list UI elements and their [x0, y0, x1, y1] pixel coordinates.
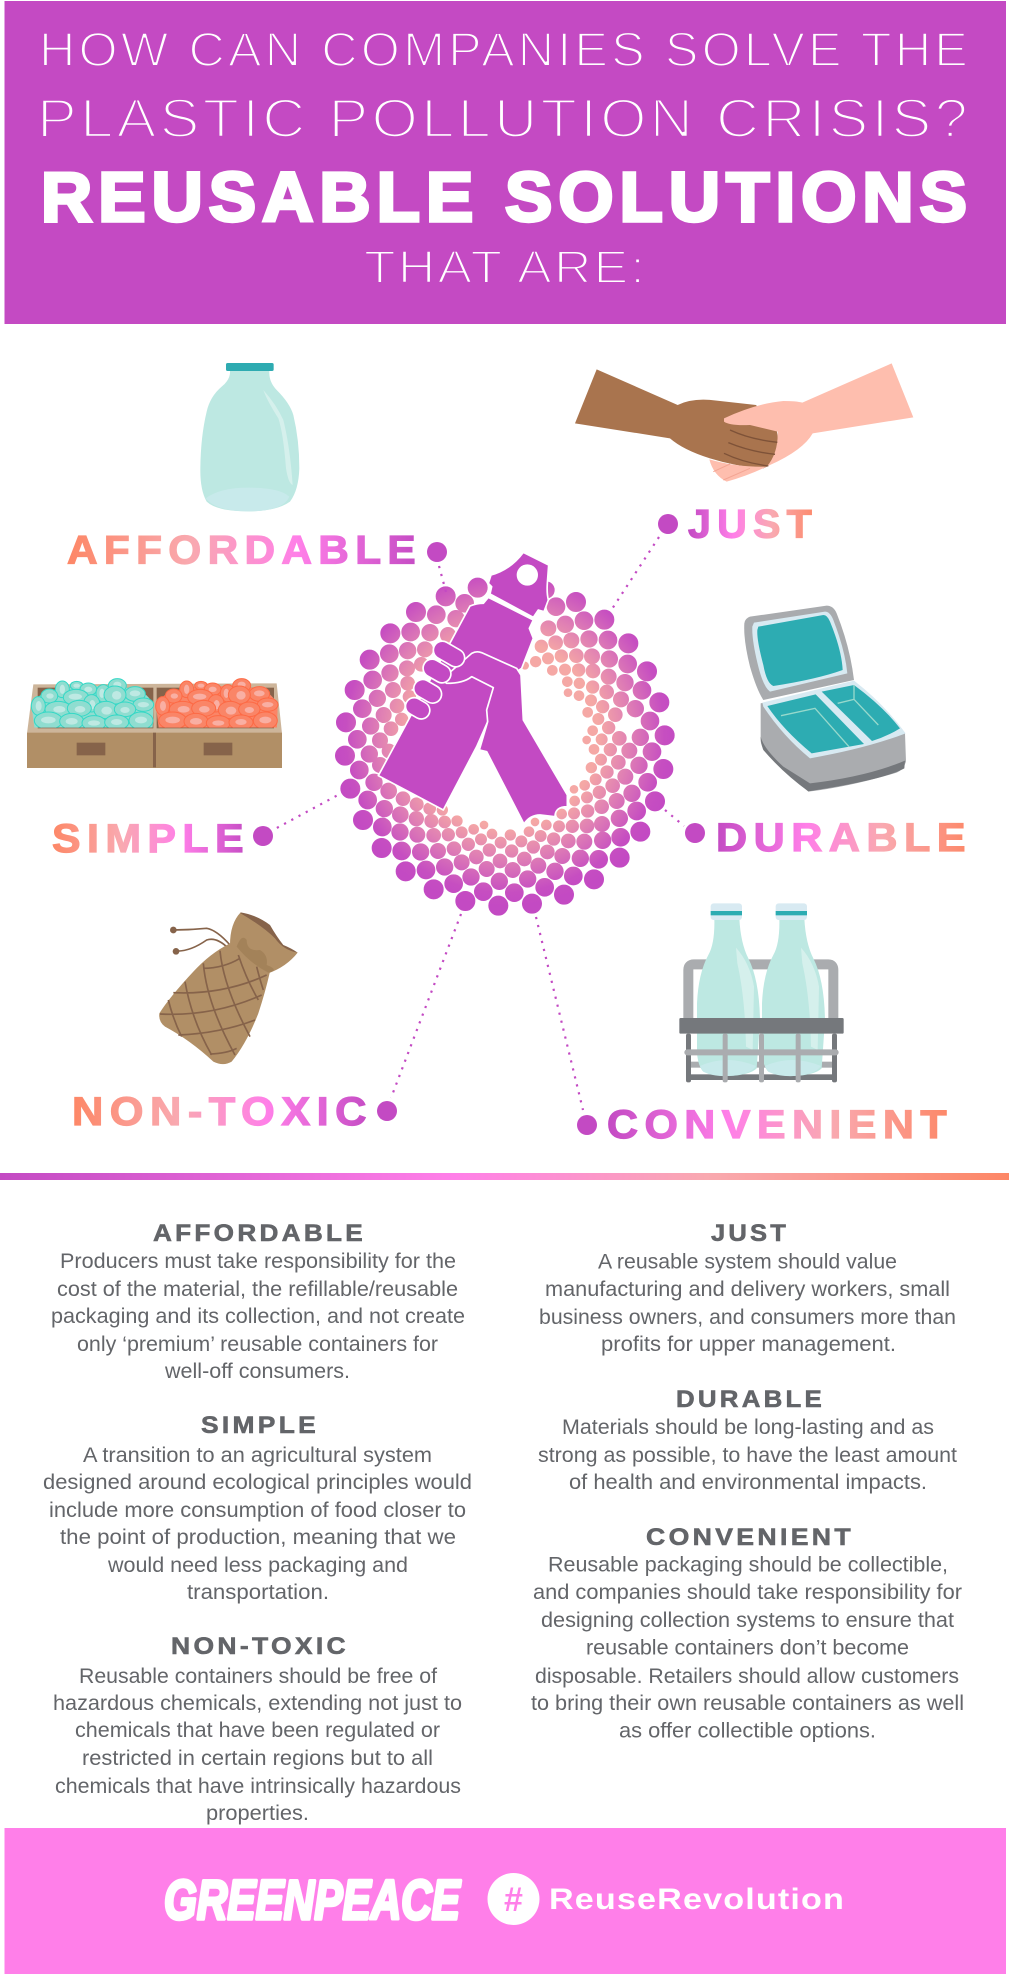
text block: just: manufacturing and delivery workers, small: [545, 1277, 950, 1301]
text block: non-toxic: NON-TOXIC: [171, 1633, 349, 1660]
text block: non-toxic: properties.: [206, 1801, 309, 1825]
icon: glass jar: [200, 363, 299, 511]
text block: convenient: Reusable packaging should be collectible,: [548, 1552, 948, 1576]
hashtag badge: [488, 1873, 540, 1925]
icon: milk bottles in carrier: [679, 903, 844, 1082]
callout: affordable: AFFORDABLE: [67, 528, 422, 572]
title line 1: HOW CAN COMPANIES SOLVE THE: [39, 24, 971, 77]
icon: handshake: [575, 363, 913, 482]
text block: non-toxic: hazardous chemicals, extending not just to: [53, 1691, 462, 1715]
text block: just: business owners, and consumers more than: [539, 1305, 956, 1329]
Greenpeace wordmark: GREENPEACE: [164, 1868, 461, 1931]
header panel: [4, 1, 1006, 324]
text block: affordable: well-off consumers.: [164, 1359, 350, 1383]
title line 3: REUSABLE SOLUTIONS: [41, 158, 973, 236]
title line 2: PLASTIC POLLUTION CRISIS?: [37, 87, 971, 149]
hashtag badge: #: [504, 1881, 523, 1919]
callout: durable: [665, 810, 972, 860]
text block: non-toxic: restricted in certain regions but to all: [82, 1746, 433, 1770]
text block: durable: DURABLE: [676, 1386, 825, 1413]
text block: just: profits for upper management.: [601, 1332, 896, 1356]
text block: affordable: only ‘premium’ reusable containers for: [77, 1332, 438, 1356]
callout: convenient: CONVENIENT: [607, 1103, 953, 1147]
callout: convenient: [536, 917, 953, 1147]
dot ring: [335, 578, 674, 915]
text block: convenient: [531, 1524, 964, 1742]
callout: just: JUST: [688, 502, 818, 546]
callout: affordable: [67, 528, 447, 592]
callout: durable: DURABLE: [716, 816, 972, 860]
text block: convenient: CONVENIENT: [646, 1524, 854, 1551]
icon: produce crates: [27, 679, 282, 768]
footer panel: [4, 1828, 1006, 1974]
text block: simple: would need less packaging and: [107, 1553, 408, 1577]
icon: lunch box: [744, 606, 906, 792]
text block: convenient: as offer collectible options.: [619, 1718, 876, 1742]
text block: convenient: designing collection systems to ensure that: [541, 1608, 954, 1632]
text block: affordable: AFFORDABLE: [153, 1220, 366, 1247]
text block: affordable: packaging and its collection, and not create: [51, 1304, 465, 1328]
callout: simple: SIMPLE: [52, 817, 250, 861]
gradient divider bar: [0, 1173, 1009, 1180]
callout: just: [612, 502, 818, 609]
callout: non-toxic: NON-TOXIC: [72, 1090, 373, 1134]
text block: convenient: disposable. Retailers should allow customers: [535, 1664, 959, 1688]
icon: mesh bag: [159, 912, 298, 1064]
callout: simple: [52, 788, 351, 861]
text block: non-toxic: chemicals that have been regulated or: [75, 1718, 440, 1742]
spray bottle held by hand: [378, 552, 567, 824]
text block: just: [539, 1220, 956, 1356]
text block: non-toxic: [53, 1633, 462, 1825]
text block: just: A reusable system should value: [598, 1250, 897, 1274]
text block: durable: of health and environmental impacts.: [569, 1470, 927, 1494]
text block: simple: transportation.: [187, 1580, 329, 1604]
text block: non-toxic: Reusable containers should be free of: [79, 1664, 437, 1688]
central emblem: dot ring with hand holding bottle: [335, 552, 674, 915]
text block: durable: [538, 1386, 957, 1494]
text block: convenient: and companies should take responsibility for: [533, 1580, 962, 1604]
text block: simple: the point of production, meaning that we: [60, 1525, 456, 1549]
text block: just: JUST: [711, 1220, 789, 1247]
text block: simple: designed around ecological principles would: [43, 1470, 472, 1494]
text block: convenient: to bring their own reusable containers as well: [531, 1691, 964, 1715]
text block: simple: include more consumption of food closer to: [49, 1498, 466, 1522]
callout: non-toxic: [72, 914, 461, 1134]
hashtag text: ReuseRevolution: [549, 1883, 845, 1916]
title line 4: THAT ARE:: [364, 241, 647, 293]
text block: convenient: reusable containers don’t become: [586, 1636, 909, 1660]
text block: affordable: Producers must take responsibility for the: [60, 1249, 456, 1273]
text block: simple: [43, 1412, 472, 1604]
text block: simple: A transition to an agricultural system: [83, 1443, 432, 1467]
text block: non-toxic: chemicals that have intrinsically hazardous: [55, 1774, 461, 1798]
text block: simple: SIMPLE: [201, 1412, 319, 1439]
text block: durable: Materials should be long-lasting and as: [562, 1415, 934, 1439]
text block: affordable: [51, 1220, 465, 1383]
text block: affordable: cost of the material, the refillable/reusable: [57, 1277, 458, 1301]
text block: durable: strong as possible, to have the least amount: [538, 1443, 957, 1467]
